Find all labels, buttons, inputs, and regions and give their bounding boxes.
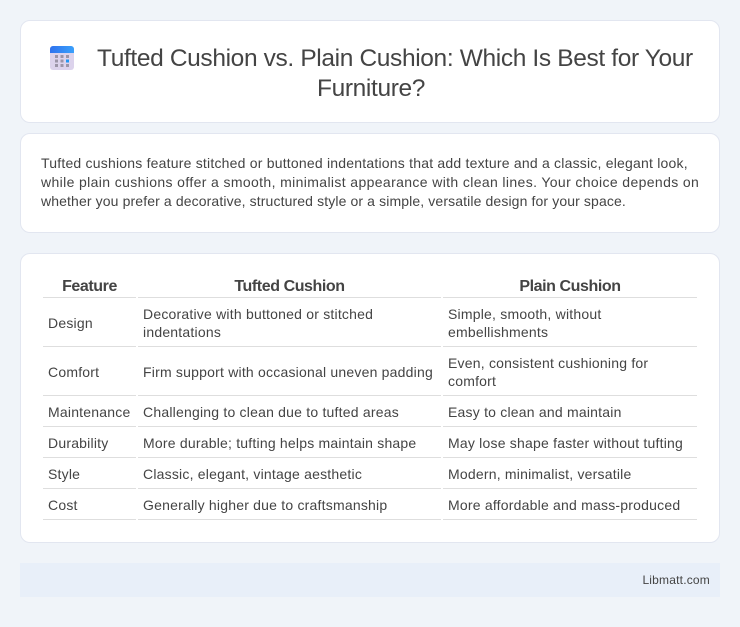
row: Design: Design: [48, 315, 93, 331]
intro panel: [20, 133, 720, 233]
intro text: while plain cushions offer a smooth, minimalist appearance with clean lines. Your choice depends on: [41, 174, 699, 190]
Durability plain: May lose shape faster without tufting: [448, 435, 683, 451]
Comfort plain: Even, consistent cushioning for: [448, 355, 648, 371]
Design plain: Simple, smooth, without: [448, 306, 601, 322]
Maintenance tufted: Challenging to clean due to tufted areas: [143, 404, 399, 420]
Cost plain: More affordable and mass-produced: [448, 497, 680, 513]
Design tufted: [143, 306, 373, 340]
Style plain: Modern, minimalist, versatile: [448, 466, 631, 482]
table panel: [20, 253, 720, 543]
footer text: Libmatt.com: Libmatt.com: [642, 573, 710, 587]
row: Style: Style: [48, 466, 80, 482]
comparison table: [43, 276, 698, 521]
header: Plain Cushion: Plain Cushion: [519, 278, 621, 295]
title: Furniture?: [317, 75, 425, 102]
Durability tufted: More durable; tufting helps maintain shape: [143, 435, 416, 451]
header panel: [20, 20, 720, 123]
row: Durability: Durability: [48, 435, 108, 451]
title: [97, 45, 693, 102]
Comfort tufted: Firm support with occasional uneven padding: [143, 364, 433, 380]
Cost tufted: Generally higher due to craftsmanship: [143, 497, 387, 513]
intro text: [41, 155, 699, 209]
Style tufted: Classic, elegant, vintage aesthetic: [143, 466, 362, 482]
Comfort plain: comfort: [448, 373, 496, 389]
row: Comfort: Comfort: [48, 364, 99, 380]
Comfort plain: [448, 355, 648, 389]
row: Maintenance: Maintenance: [48, 404, 130, 420]
intro text: whether you prefer a decorative, structured style or a simple, versatile design for your space.: [41, 193, 626, 209]
footer bar: [20, 563, 720, 597]
Design plain: embellishments: [448, 324, 548, 340]
intro text: Tufted cushions feature stitched or buttoned indentations that add texture and a classic, elegant look,: [41, 155, 688, 171]
title: Tufted Cushion vs. Plain Cushion: Which Is Best for Your: [97, 45, 693, 72]
Design tufted: indentations: [143, 324, 221, 340]
Design tufted: Decorative with buttoned or stitched: [143, 306, 373, 322]
header: Tufted Cushion: Tufted Cushion: [234, 278, 345, 295]
header: Feature: Feature: [62, 278, 117, 295]
icon: calendar: [50, 46, 74, 70]
Maintenance plain: Easy to clean and maintain: [448, 404, 622, 420]
Design plain: [448, 306, 602, 340]
row: Cost: Cost: [48, 497, 78, 513]
